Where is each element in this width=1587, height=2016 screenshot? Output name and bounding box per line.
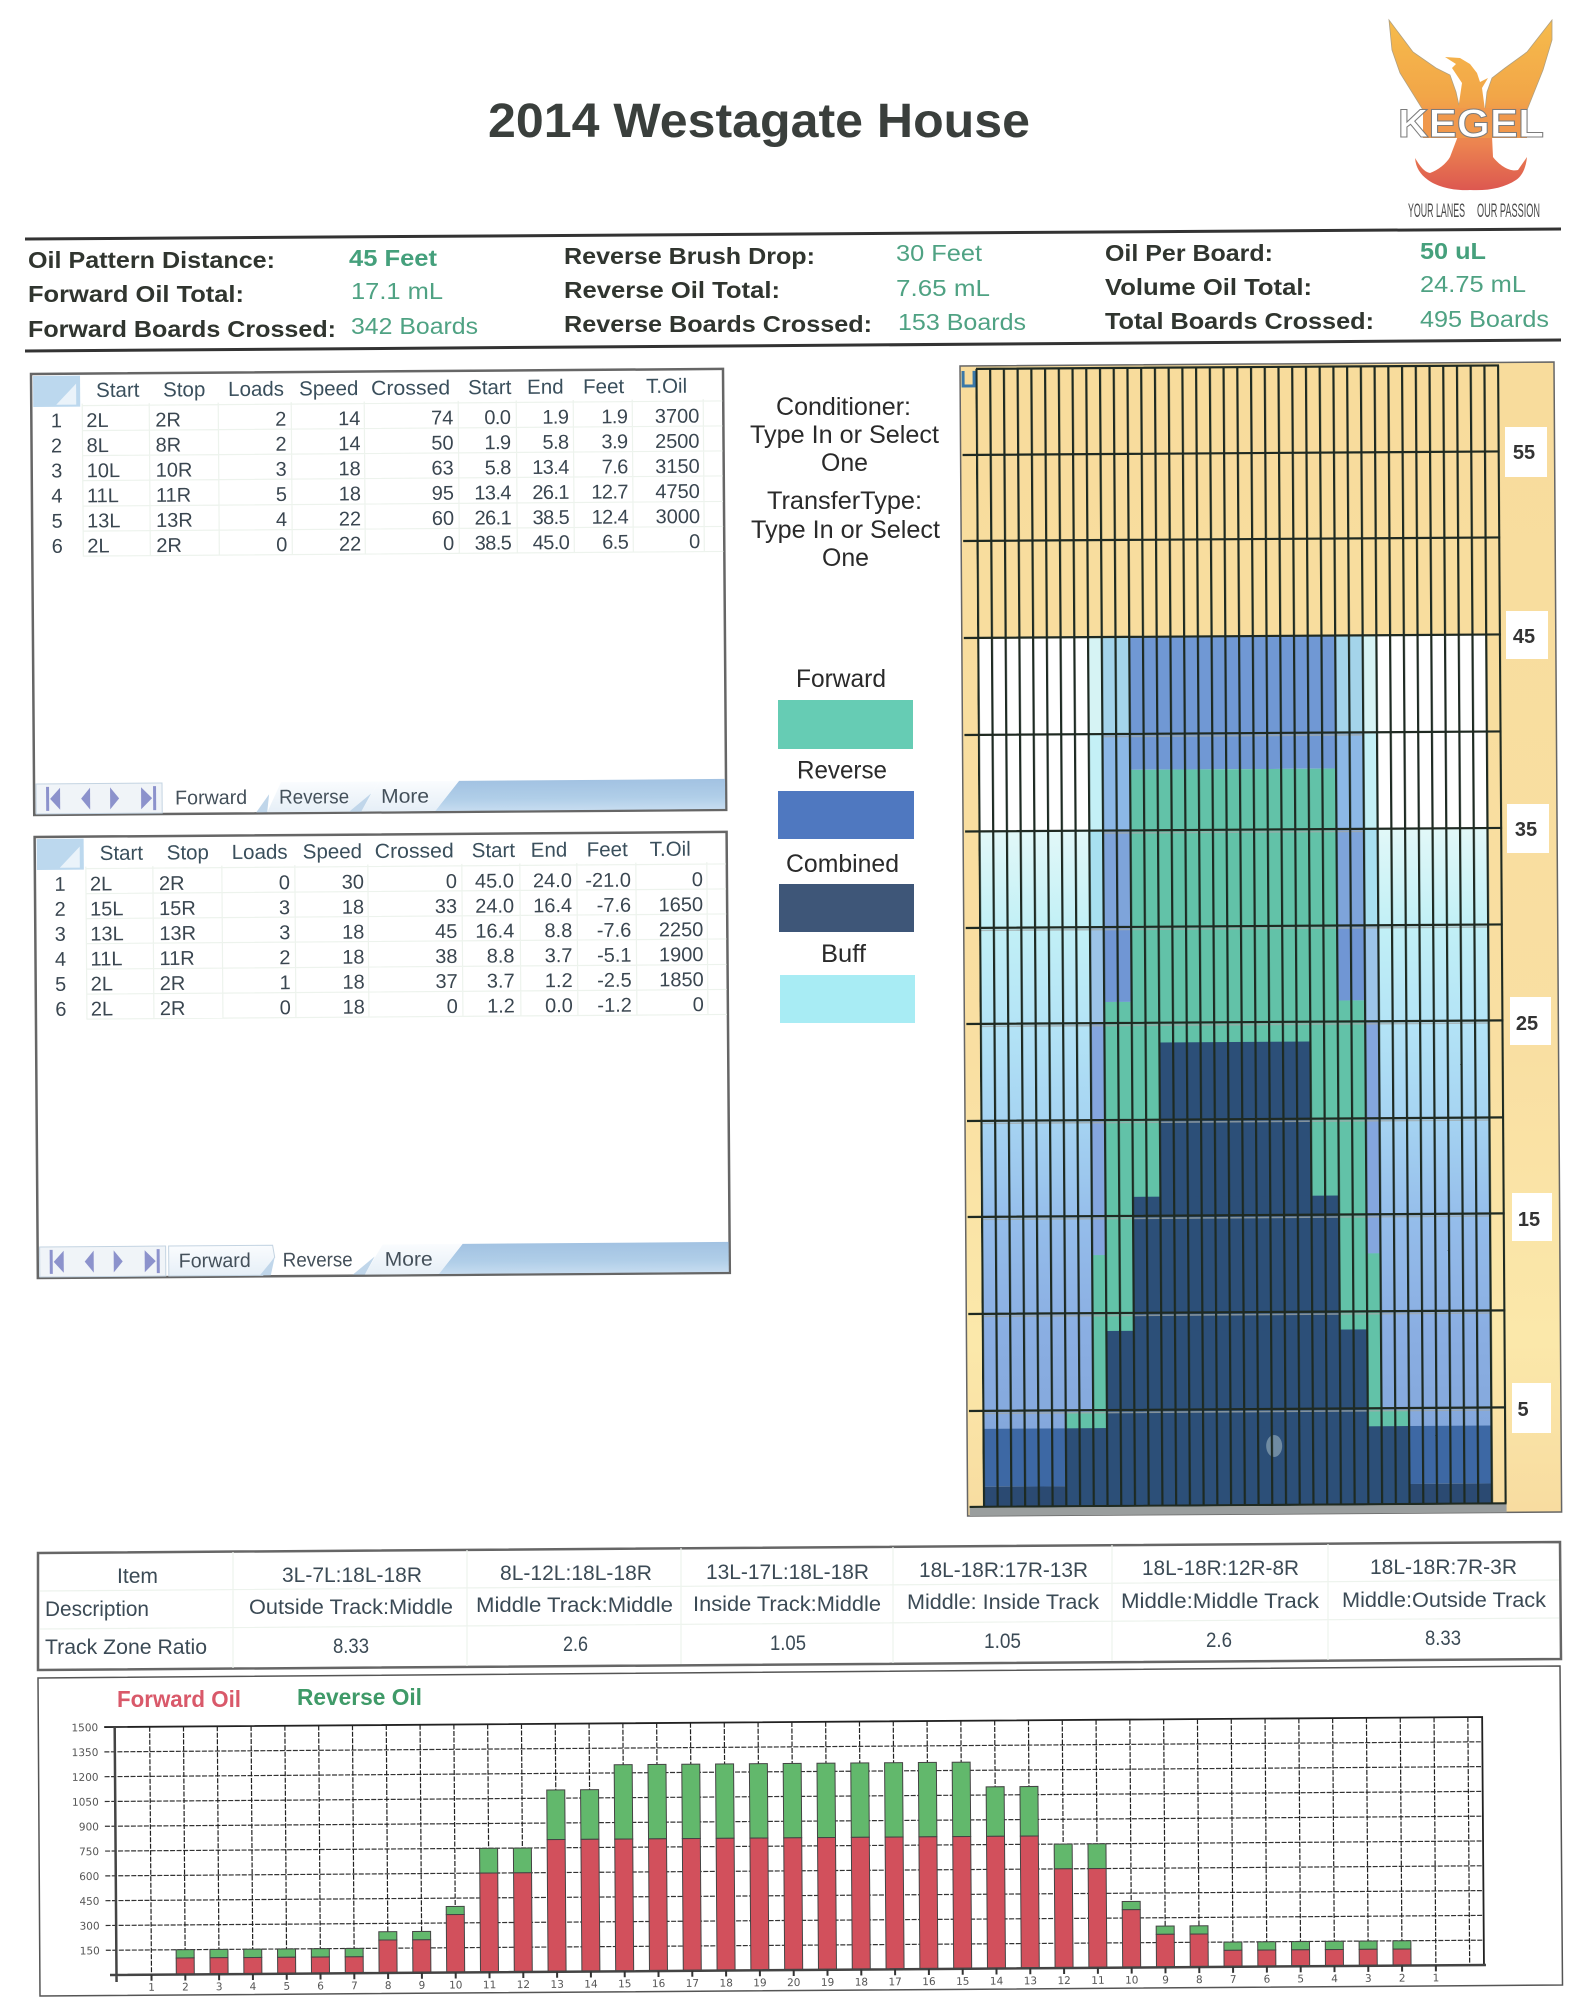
panel: forward table: 22 — [339, 508, 361, 531]
panel: reverse table: 18 — [342, 922, 364, 944]
panel: reverse table: -7.6 — [597, 920, 631, 942]
panel: oil pattern grid — [960, 362, 1562, 1516]
panel: forward table: 3.9 — [601, 431, 628, 453]
distance labels: 5 — [1517, 1399, 1529, 1421]
panel: forward table: 50 — [431, 432, 454, 455]
panel: reverse table: 15R — [159, 898, 196, 920]
panel: forward table: 13R — [156, 510, 193, 532]
buff zones outside — [978, 635, 1491, 1432]
panel: reverse table: 37 — [435, 971, 458, 993]
colour legend — [778, 665, 915, 1023]
panel: reverse table: 13L — [90, 923, 124, 946]
panel: reverse table: -1.2 — [597, 995, 632, 1017]
pattern statistics: Reverse Oil Total: — [564, 277, 780, 303]
panel: forward table: 1.9 — [484, 432, 511, 454]
distance labels: 15 — [1518, 1209, 1540, 1231]
track zone ratio table: 18L-18R:17R-13R — [919, 1559, 1088, 1582]
panel: reverse table: 15L — [90, 898, 124, 921]
panel: forward table: 26.1 — [474, 507, 512, 530]
panel: reverse table: Start — [100, 842, 143, 865]
panel: reverse table: 13R — [159, 923, 196, 945]
track zone ratio table: 13L-17L:18L-18R — [706, 1561, 869, 1584]
pattern statistics: 30 Feet — [896, 240, 982, 266]
panel: forward table: 2L — [86, 410, 109, 432]
panel: forward table: 1.9 — [542, 407, 569, 429]
reverse oil zones — [1088, 635, 1380, 1255]
x axis labels: 13 — [550, 1979, 564, 1991]
panel: reverse table: 1650 — [659, 894, 703, 916]
panel: forward table: 12.7 — [591, 481, 628, 504]
panel: reverse table: 30 — [342, 872, 364, 894]
panel: reverse table: 24.0 — [533, 870, 572, 892]
track zone ratio table: 8.33 — [333, 1635, 369, 1658]
panel: reverse table: 2R — [160, 998, 186, 1020]
panel: reverse table: 1 — [54, 874, 66, 896]
x axis labels: 6 — [317, 1980, 324, 1993]
distance labels: 45 — [1513, 626, 1535, 648]
panel: forward table: 6 — [52, 536, 63, 558]
pattern statistics: Oil Per Board: — [1105, 240, 1273, 266]
logo: Kegel phoenix — [1389, 20, 1552, 222]
x axis labels — [148, 1972, 1439, 1994]
panel: forward table: 45.0 — [533, 532, 570, 554]
panel: forward table: 95 — [432, 483, 454, 505]
x axis labels: 3 — [216, 1981, 223, 1993]
panel: reverse table: 2L — [91, 973, 113, 996]
x axis labels: 19 — [753, 1977, 767, 1989]
distance labels: 25 — [1516, 1013, 1538, 1035]
panel: reverse table: End — [531, 839, 567, 862]
pattern statistics: Oil Pattern Distance: — [28, 247, 275, 273]
track zone ratio table: 18L-18R:7R-3R — [1370, 1556, 1517, 1579]
panel: forward table: 2R — [156, 535, 182, 557]
panel: reverse table: 0 — [446, 871, 457, 893]
panel: forward table: 2 — [275, 409, 286, 431]
panel: forward table: 2 — [275, 434, 287, 456]
y axis labels: 900 — [79, 1821, 99, 1833]
panel: reverse table: 3.7 — [487, 970, 515, 993]
conditioner and transfer notes: Conditioner: — [776, 393, 911, 421]
pattern statistics: 7.65 mL — [896, 275, 990, 301]
y axis labels: 1350 — [72, 1747, 98, 1759]
panel: reverse table: 18 — [343, 997, 365, 1019]
panel: reverse table: Start — [472, 839, 515, 862]
x axis labels: 6 — [1264, 1974, 1271, 1986]
x axis labels: 4 — [250, 1981, 257, 1993]
panel: reverse table: 1900 — [659, 944, 704, 966]
colour legend: Reverse — [797, 756, 887, 784]
panel: reverse table: 3 — [279, 922, 290, 944]
panel: reverse table: -7.6 — [597, 895, 631, 917]
panel: forward table: More — [381, 786, 429, 808]
panel: reverse table: 16.4 — [533, 895, 572, 917]
plot area — [71, 1712, 1486, 1994]
panel: reverse table: 5 — [55, 974, 66, 996]
panel: forward table: 3 — [51, 460, 62, 483]
x axis labels: 12 — [517, 1979, 530, 1991]
pattern statistics: 24.75 mL — [1420, 271, 1526, 297]
panel: forward table: 3 — [276, 459, 287, 481]
track zone ratio table: 1.05 — [984, 1630, 1021, 1653]
pattern statistics: 17.1 mL — [351, 278, 443, 304]
panel: reverse table: 18 — [342, 972, 365, 994]
panel: reverse table: 2L — [91, 998, 113, 1021]
colour legend: Buff — [821, 940, 866, 968]
panel: reverse table: 1 — [279, 972, 291, 994]
x axis labels: 13 — [1024, 1975, 1037, 1987]
x axis labels: 10 — [449, 1979, 463, 1992]
x axis labels: 19 — [821, 1977, 834, 1989]
x axis labels: 1 — [148, 1982, 155, 1994]
chart legend: Forward Oil — [117, 1686, 241, 1712]
chart legend: Reverse Oil — [297, 1684, 422, 1710]
panel: reverse table: 0 — [447, 996, 458, 1018]
panel: forward table: 13L — [87, 510, 121, 532]
panel: reverse table: 16.4 — [475, 920, 514, 943]
x axis labels: 17 — [888, 1976, 902, 1988]
panel: forward table: 0 — [443, 533, 454, 555]
x axis labels: 12 — [1057, 1975, 1071, 1987]
panel: reverse table: 2L — [90, 873, 112, 896]
title: 2014 Westagate House — [488, 95, 1030, 148]
track zone ratio table: 18L-18R:12R-8R — [1142, 1557, 1299, 1580]
panel: reverse table — [35, 832, 730, 1278]
x axis labels: 2 — [1399, 1973, 1406, 1985]
panel: forward table: 4750 — [655, 481, 700, 503]
panel: reverse table: 8.8 — [544, 920, 572, 942]
x axis labels: 18 — [855, 1976, 868, 1989]
y axis labels: 750 — [79, 1846, 99, 1858]
panel: forward table: 1 — [51, 410, 62, 432]
x axis labels: 9 — [1162, 1974, 1169, 1986]
panel: forward table: 3000 — [655, 506, 700, 528]
panel: forward table: 38.5 — [532, 507, 570, 529]
track zone ratio table: Middle:Outside Track — [1342, 1589, 1547, 1612]
panel: forward table: 22 — [339, 534, 361, 556]
pattern statistics: Forward Boards Crossed: — [28, 316, 336, 342]
panel: forward table: 38.5 — [475, 532, 512, 555]
x axis labels: 5 — [1297, 1973, 1304, 1985]
panel: reverse table: 2R — [159, 873, 185, 895]
panel: reverse table: 3 — [55, 924, 66, 946]
conditioner and transfer notes: Type In or Select — [751, 516, 940, 544]
panel: forward table: 2 — [51, 435, 62, 457]
panel: reverse table: 2 — [279, 947, 291, 969]
panel: forward table: 2R — [155, 409, 181, 432]
panel: reverse table: Crossed — [375, 839, 454, 863]
panel: reverse table: 8.8 — [487, 945, 515, 968]
x axis labels: 18 — [719, 1977, 733, 1990]
y axis labels: 150 — [80, 1945, 100, 1957]
panel: forward table: 14 — [338, 433, 361, 455]
panel: forward table: 13.4 — [532, 457, 569, 479]
panel: reverse table: 3 — [279, 897, 290, 919]
panel: forward table: Speed — [299, 377, 358, 401]
track zone ratio table: Item — [117, 1565, 158, 1588]
panel: reverse table: 1850 — [659, 969, 704, 991]
pattern statistics: 50 uL — [1420, 238, 1486, 264]
x axis labels: 16 — [652, 1978, 666, 1990]
panel: forward table: 74 — [431, 407, 453, 430]
panel: forward table — [31, 369, 726, 815]
x axis labels: 14 — [990, 1975, 1004, 1988]
pattern statistics: 342 Boards — [351, 313, 478, 339]
panel: forward table: 7.6 — [602, 456, 628, 479]
panel: forward table: 5.8 — [542, 432, 569, 454]
panel: reverse table: 18 — [342, 897, 364, 919]
panel: reverse table: Reverse — [283, 1249, 353, 1272]
x axis labels: 11 — [483, 1979, 496, 1991]
y axis labels: 1050 — [72, 1797, 99, 1809]
panel: reverse table: Speed — [303, 840, 362, 864]
x axis labels: 8 — [385, 1980, 392, 1992]
distance labels — [1505, 427, 1552, 1433]
track zone ratio table: Outside Track:Middle — [249, 1596, 453, 1619]
panel: forward table: 5 — [276, 484, 287, 506]
panel: forward table: 13.4 — [474, 482, 511, 505]
track zone ratio table: 3L-7L:18L-18R — [282, 1564, 422, 1587]
panel: reverse table: 4 — [55, 949, 66, 971]
panel: forward table: 8R — [155, 434, 181, 457]
forward oil zones — [1061, 768, 1409, 1429]
panel: reverse table: 0.0 — [545, 995, 573, 1017]
panel: reverse table: 45.0 — [475, 870, 514, 893]
logo: Kegel phoenix: YOUR LANES — [1408, 201, 1465, 222]
pattern statistics: 45 Feet — [349, 245, 437, 271]
x axis labels: 10 — [1125, 1975, 1138, 1987]
bottom rule — [25, 340, 1561, 351]
track zone ratio table: Middle Track:Middle — [476, 1594, 673, 1617]
conditioner and transfer notes: One — [822, 544, 869, 572]
track zone ratio table: Middle:Middle Track — [1121, 1590, 1320, 1613]
panel: forward table: 2L — [87, 535, 110, 558]
panel: reverse table: -5.1 — [597, 945, 632, 967]
combined oil zones — [981, 1040, 1492, 1507]
panel: forward table: 3150 — [655, 456, 700, 478]
panel: oil bar chart — [38, 1666, 1562, 1996]
panel: reverse table: 2 — [54, 899, 66, 921]
x axis labels: 9 — [419, 1980, 425, 1992]
panel: forward table: 10R — [156, 460, 193, 482]
panel: reverse table: -21.0 — [585, 870, 631, 892]
panel: reverse table: 11R — [159, 948, 195, 970]
panel: forward table: End — [527, 376, 564, 399]
track zone ratio table: Track Zone Ratio — [45, 1636, 207, 1659]
colour legend: Forward — [796, 665, 886, 693]
panel: reverse table: 0 — [279, 872, 290, 894]
track zone ratio table: 8.33 — [1425, 1627, 1461, 1650]
x axis labels: 8 — [1196, 1974, 1203, 1986]
panel: reverse table: 1.2 — [487, 995, 515, 1018]
panel: forward table: 11L — [87, 485, 119, 507]
track zone ratio table: 2.6 — [563, 1633, 588, 1656]
panel: reverse table: 0 — [693, 994, 704, 1016]
panel: forward table: Reverse — [279, 786, 349, 809]
panel: reverse table: 3.7 — [545, 945, 573, 967]
panel: forward table: 14 — [338, 408, 360, 430]
panel: forward table: 0 — [276, 534, 287, 556]
panel: reverse table: 45 — [435, 921, 457, 943]
panel: reverse table: -2.5 — [597, 970, 632, 992]
panel: reverse table: 1.2 — [545, 970, 573, 992]
y axis labels — [71, 1722, 100, 1958]
x axis labels: 3 — [1365, 1973, 1372, 1985]
x axis labels: 11 — [1091, 1975, 1105, 1987]
panel: reverse table: 6 — [55, 999, 67, 1021]
panel: forward table: 63 — [431, 458, 454, 480]
panel: reverse table: More — [385, 1249, 433, 1271]
pattern statistics: 495 Boards — [1420, 306, 1549, 332]
panel: reverse table: 0 — [280, 997, 291, 1019]
conditioner and transfer notes — [750, 393, 940, 572]
x axis labels: 17 — [686, 1978, 699, 1990]
panel: forward table: 4 — [51, 486, 63, 508]
panel: forward table: Start — [468, 376, 512, 399]
track zone ratio table: 2.6 — [1206, 1629, 1232, 1652]
panel: reverse table: 11L — [90, 948, 122, 971]
top rule — [25, 229, 1561, 239]
x axis labels: 14 — [584, 1978, 598, 1991]
panel: forward table: 2500 — [655, 431, 700, 453]
panel: forward table: Stop — [163, 378, 205, 402]
x axis labels: 15 — [956, 1976, 970, 1988]
panel: reverse table: 33 — [435, 896, 457, 918]
panel: forward table: 5.8 — [485, 457, 511, 479]
track zone ratio table: 8L-12L:18L-18R — [500, 1562, 652, 1585]
panel: forward table: 18 — [338, 458, 361, 480]
logo: Kegel phoenix: KEGEL — [1398, 102, 1544, 146]
y axis labels: 1200 — [72, 1772, 99, 1784]
panel: forward table: 0 — [689, 531, 700, 553]
pattern statistics — [28, 238, 1549, 342]
pattern statistics: Forward Oil Total: — [28, 281, 244, 307]
panel: forward table: 26.1 — [532, 482, 569, 504]
panel: reverse table: Feet — [587, 838, 628, 861]
x axis labels: 15 — [618, 1978, 632, 1990]
panel: reverse table: T.Oil — [650, 838, 691, 861]
y axis labels: 1500 — [71, 1722, 98, 1734]
colour legend: Combined — [786, 850, 899, 878]
panel: forward table: 3700 — [655, 406, 699, 428]
x axis labels: 4 — [1331, 1973, 1338, 1985]
distance labels: 55 — [1513, 442, 1535, 464]
stacked bars — [175, 1759, 1411, 1975]
x axis labels: 7 — [1230, 1974, 1237, 1986]
conditioner and transfer notes: TransferType: — [767, 487, 922, 515]
conditioner and transfer notes: Type In or Select — [750, 421, 939, 449]
panel: forward table: Forward — [175, 787, 247, 809]
distance labels: 35 — [1515, 819, 1537, 841]
chart legend — [117, 1684, 422, 1712]
conditioner and transfer notes: One — [821, 449, 868, 477]
panel: reverse table: 38 — [435, 946, 458, 968]
panel: reverse table: 18 — [342, 947, 365, 969]
x axis labels: 5 — [283, 1981, 290, 1993]
panel: forward table: Loads — [228, 378, 284, 401]
panel: forward table: 10L — [87, 460, 120, 482]
panel: forward table: Feet — [583, 375, 625, 398]
y axis labels: 450 — [79, 1896, 100, 1908]
panel: forward table: 4 — [276, 509, 287, 531]
panel: forward table: 0.0 — [484, 407, 511, 429]
x axis labels: 16 — [922, 1976, 936, 1988]
track zone ratio table: Description — [45, 1598, 149, 1621]
panel: forward table: 8L — [86, 435, 109, 457]
panel: forward table: 60 — [432, 508, 454, 530]
y axis labels: 600 — [79, 1871, 99, 1883]
panel: reverse table: 2R — [160, 973, 185, 995]
track zone ratio table — [38, 1542, 1561, 1670]
panel: forward table: 1.9 — [601, 406, 628, 428]
panel: reverse table: 2250 — [659, 919, 703, 941]
panel: forward table: 12.4 — [591, 507, 629, 529]
panel: reverse table: Loads — [232, 841, 288, 864]
x axis labels: 1 — [1433, 1972, 1439, 1984]
panel: forward table: Start — [96, 379, 140, 402]
panel: reverse table: 0 — [692, 869, 703, 891]
panel: forward table: 11R — [156, 485, 191, 507]
panel: reverse table: Forward — [179, 1250, 251, 1272]
x axis labels: 7 — [351, 1980, 358, 1992]
track zone ratio table: 1.05 — [770, 1632, 806, 1655]
panel: forward table: Crossed — [371, 376, 450, 400]
x axis labels: 2 — [182, 1981, 189, 1994]
y axis labels: 300 — [80, 1921, 100, 1933]
panel: reverse table: 24.0 — [475, 895, 514, 918]
track zone ratio table: Middle: Inside Track — [907, 1591, 1100, 1614]
pattern statistics: Reverse Brush Drop: — [564, 243, 815, 269]
panel: forward table: T.Oil — [646, 375, 687, 398]
x axis labels: 20 — [787, 1977, 801, 1989]
panel: forward table: 5 — [51, 511, 63, 533]
pattern statistics: Volume Oil Total: — [1105, 274, 1312, 300]
panel: reverse table: Stop — [167, 841, 209, 865]
pattern statistics: Total Boards Crossed: — [1105, 308, 1374, 334]
track zone ratio table: Inside Track:Middle — [693, 1593, 881, 1616]
pattern statistics: Reverse Boards Crossed: — [564, 311, 872, 337]
pattern statistics: 153 Boards — [898, 309, 1026, 335]
panel: forward table: 18 — [339, 483, 361, 506]
panel: forward table: 6.5 — [602, 532, 629, 554]
